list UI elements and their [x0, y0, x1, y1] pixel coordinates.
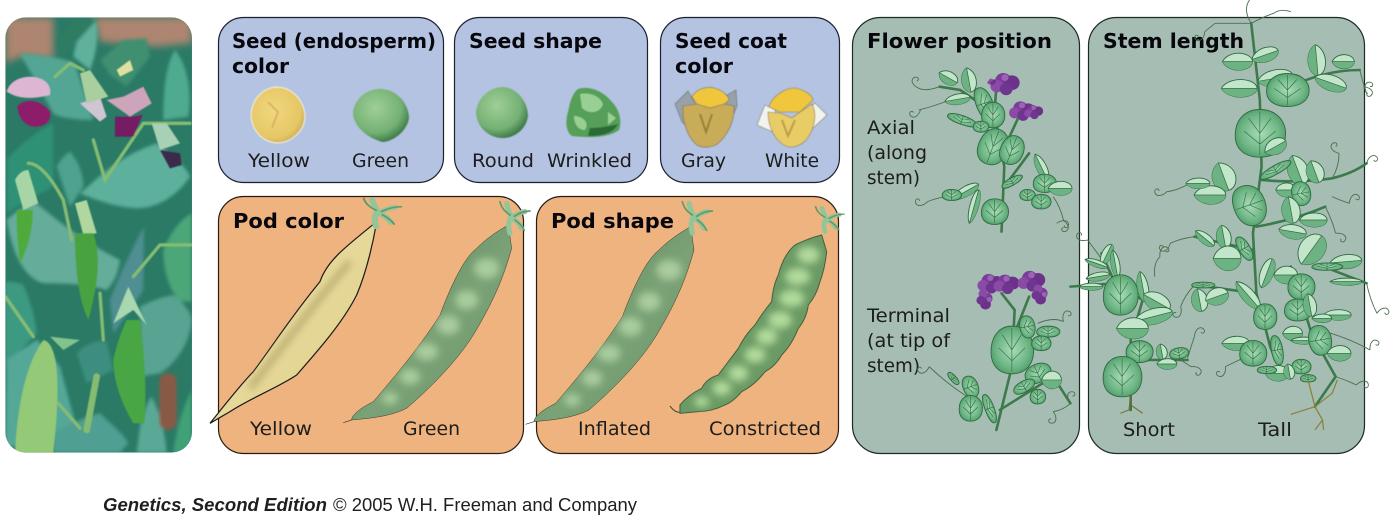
label: yellow: Yellow [247, 150, 310, 172]
heading: seed shape: Seed shape [469, 29, 602, 53]
label: gray: Gray [681, 150, 726, 172]
label: tall: Tall [1257, 419, 1292, 441]
panel: pod shape background [536, 196, 838, 454]
panel: stem length background [1088, 18, 1364, 454]
illustration: yellow pod [210, 198, 401, 423]
footer credit: © 2005 W.H. Freeman and Company [333, 495, 637, 515]
label: green: Green [352, 150, 409, 172]
icon: wrinkled seed [566, 88, 620, 137]
illustration: inflated pod [526, 202, 712, 424]
text: terminal at tip of stem: (at tip of [867, 330, 951, 352]
heading: stem length: Stem length [1103, 29, 1244, 53]
icon: round seed [476, 87, 528, 138]
label: wrinkled: Wrinkled [547, 150, 632, 172]
heading: seed coat color: color [675, 54, 733, 78]
heading: pod shape: Pod shape [551, 209, 674, 233]
text: axial along stem: Axial [867, 117, 915, 139]
illustration: short pea plant [1070, 231, 1205, 413]
heading: flower position: Flower position [867, 29, 1052, 53]
panel: seed endosperm color [218, 18, 444, 182]
label: green pod: Green [403, 418, 460, 440]
panel: pod color background [218, 196, 524, 454]
heading: pod color: Pod color [233, 209, 344, 233]
panel: seed coat color [660, 18, 840, 182]
text: axial along stem: (along [867, 142, 927, 164]
text: terminal at tip of stem: stem) [867, 355, 920, 377]
label: inflated: Inflated [578, 418, 651, 440]
panel: flower position background [852, 18, 1080, 454]
label: yellow pod: Yellow [249, 418, 312, 440]
illustration: tall pea plant [1154, 0, 1390, 430]
icon: white seed coat [757, 88, 827, 147]
text: axial along stem: stem) [867, 167, 920, 189]
footer credit: Genetics, Second Edition [103, 495, 327, 515]
label: round: Round [472, 150, 534, 172]
label: constricted: Constricted [709, 418, 821, 440]
heading: seed endosperm color: color [232, 54, 289, 78]
illustration: axial flowering plant [909, 67, 1072, 232]
footer credit [103, 495, 637, 515]
icon: green seed [353, 89, 409, 142]
illustration: constricted pod [670, 207, 844, 413]
label: short: Short [1123, 419, 1175, 441]
photo: pea plant with flowers and pods [5, 17, 192, 453]
panel: seed shape [454, 18, 648, 182]
label: white: White [765, 150, 819, 172]
icon: yellow seed [251, 87, 305, 143]
heading: seed coat color: Seed coat [675, 29, 787, 53]
heading: seed endosperm color: Seed (endosperm) [232, 29, 436, 53]
icon: gray seed coat [675, 87, 737, 147]
illustration: terminal flowering plant [918, 271, 1076, 430]
illustration: green pod [343, 202, 530, 423]
text: terminal at tip of stem: Terminal [866, 305, 950, 327]
